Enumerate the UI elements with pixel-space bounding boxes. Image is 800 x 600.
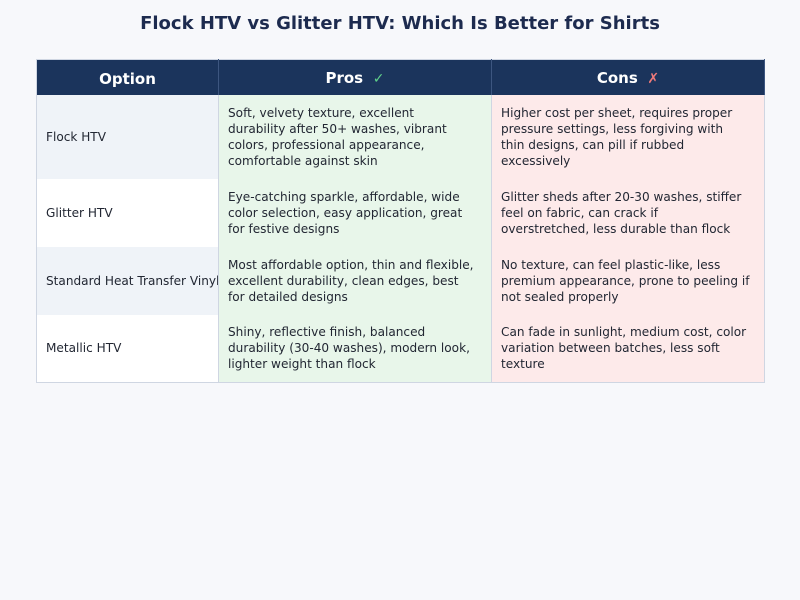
comparison table: not sealed properly (501, 290, 619, 304)
comparison table: premium appearance, prone to peeling if (501, 274, 750, 288)
comparison table: lighter weight than flock (228, 357, 376, 371)
comparison table: overstretched, less durable than flock (501, 222, 730, 236)
comparison table: feel on fabric, can crack if (501, 206, 658, 220)
comparison table: durability (30-40 washes), modern look, (228, 341, 470, 355)
comparison table: Metallic HTV (46, 341, 121, 355)
comparison table: Option (99, 70, 156, 88)
comparison table: variation between batches, less soft (501, 341, 720, 355)
comparison table: for detailed designs (228, 290, 348, 304)
comparison table: durability after 50+ washes, vibrant (228, 122, 447, 136)
comparison table: pressure settings, less forgiving with (501, 122, 723, 136)
comparison table: excessively (501, 154, 570, 168)
comparison table: No texture, can feel plastic-like, less (501, 258, 720, 272)
comparison table: Soft, velvety texture, excellent (228, 106, 414, 120)
comparison table: Glitter sheds after 20-30 washes, stiffer (501, 190, 741, 204)
comparison table: Cons ✗ (597, 69, 659, 87)
comparison table (36, 59, 765, 383)
comparison table: thin designs, can pill if rubbed (501, 138, 684, 152)
comparison table: for festive designs (228, 222, 339, 236)
comparison table: Shiny, reflective finish, balanced (228, 325, 425, 339)
comparison table: Eye-catching sparkle, affordable, wide (228, 190, 460, 204)
comparison table: Most affordable option, thin and flexible, (228, 258, 474, 272)
comparison table: Glitter HTV (46, 206, 113, 220)
comparison table: color selection, easy application, great (228, 206, 462, 220)
comparison table: comfortable against skin (228, 154, 378, 168)
comparison table: texture (501, 357, 545, 371)
title: Flock HTV vs Glitter HTV: Which Is Better for Shirts (140, 13, 660, 34)
comparison table: Standard Heat Transfer Vinyl (46, 274, 218, 288)
comparison table: colors, professional appearance, (228, 138, 424, 152)
comparison table: excellent durability, clean edges, best (228, 274, 458, 288)
comparison table: Can fade in sunlight, medium cost, color (501, 325, 746, 339)
comparison table: Pros ✓ (325, 69, 385, 87)
comparison table: Higher cost per sheet, requires proper (501, 106, 732, 120)
comparison table: Flock HTV (46, 130, 106, 144)
